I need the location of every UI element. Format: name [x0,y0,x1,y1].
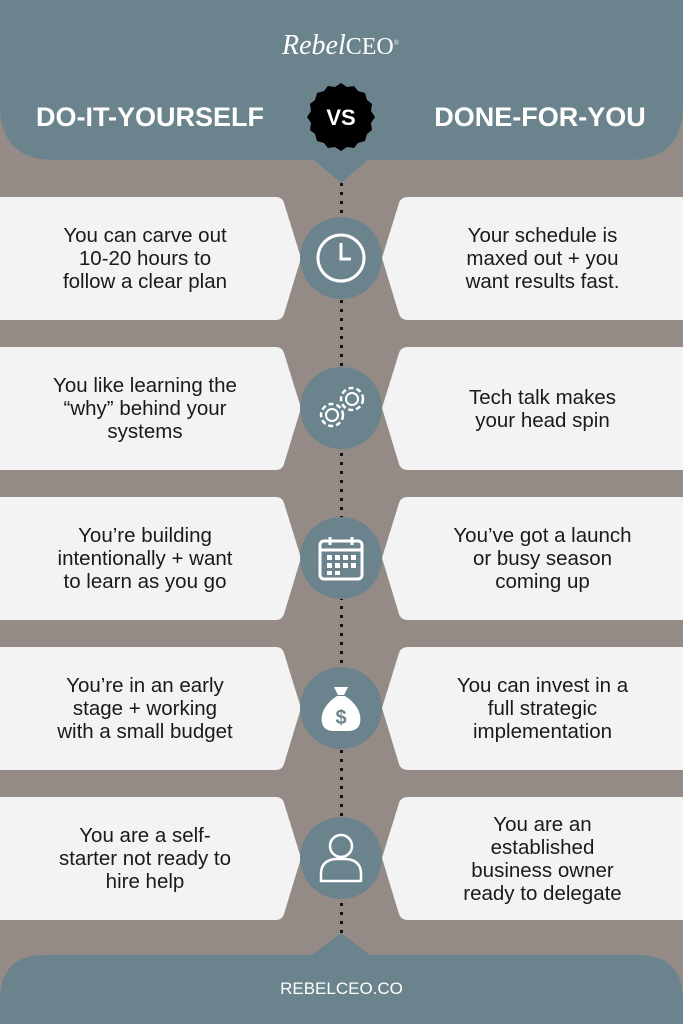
text: diy 1 [63,224,227,293]
text: diy 5 [59,824,231,893]
heading: DFY: DONE-FOR-YOU [434,102,646,132]
badge: VS: VS [326,105,356,130]
text: diy 1: 10-20 hours to [79,247,211,270]
text: dfy 4: implementation [473,720,612,743]
text: dfy 3: You’ve got a launch [453,524,632,547]
row 3 [0,497,683,620]
text: diy 2: You like learning the [53,374,237,397]
logo: RebelCEO® [282,30,399,61]
header band [0,0,683,183]
text: dfy 5 [463,812,622,904]
text: diy 5: starter not ready to [59,847,231,870]
text: diy 4 [57,674,233,743]
text: dfy 3 [453,524,632,593]
text: dfy 4: full strategic [488,697,597,720]
text: diy 4: You’re in an early [66,674,224,697]
footer url: REBELCEO.CO [280,979,403,998]
text: diy 3: intentionally + want [58,547,232,570]
text: diy 5: hire help [106,870,184,893]
text: dfy 1 [466,224,619,293]
text: diy 1: follow a clear plan [63,270,227,293]
text: dfy 5: business owner [471,858,614,882]
text: diy 5: You are a self- [79,824,211,847]
text: diy 2 [53,374,237,443]
text: dfy 2: Tech talk makes [469,386,616,408]
badge: VS [307,83,375,151]
text: diy 4: with a small budget [57,720,233,743]
row 4 [0,647,683,770]
text: dfy 2: your head spin [475,408,610,432]
text: dfy 1: maxed out + you [466,247,619,270]
text: dfy 3: coming up [495,570,590,593]
text: dfy 5: You are an [493,812,592,836]
text: diy 2: “why” behind your [64,397,226,420]
dotted center line [340,183,343,943]
text: diy 3: You’re building [78,524,212,547]
row 2 [0,347,683,470]
row 5 [0,797,683,920]
text: dfy 1: want results fast. [466,270,619,293]
text: dfy 5: established [491,836,594,858]
icon: money bag: $ [335,707,347,729]
text: dfy 1: Your schedule is [468,224,617,247]
footer band [0,933,683,1024]
heading: DIY: DO-IT-YOURSELF [36,102,264,132]
text: diy 3 [58,524,232,593]
icon: gears [320,386,364,428]
text: dfy 4 [457,674,628,743]
icon: clock [316,234,366,282]
text: diy 3: to learn as you go [64,570,226,593]
text: diy 2: systems [107,420,183,443]
text: diy 1: You can carve out [63,224,227,247]
text: dfy 4: You can invest in a [457,674,628,697]
text: dfy 3: or busy season [473,547,612,570]
icon: person [320,834,362,882]
text: diy 4: stage + working [73,697,217,720]
icon: money bag [322,687,360,731]
text: dfy 2 [469,386,616,432]
text: dfy 5: ready to delegate [463,882,622,904]
row 1 [0,197,683,320]
icon: calendar [318,537,364,580]
